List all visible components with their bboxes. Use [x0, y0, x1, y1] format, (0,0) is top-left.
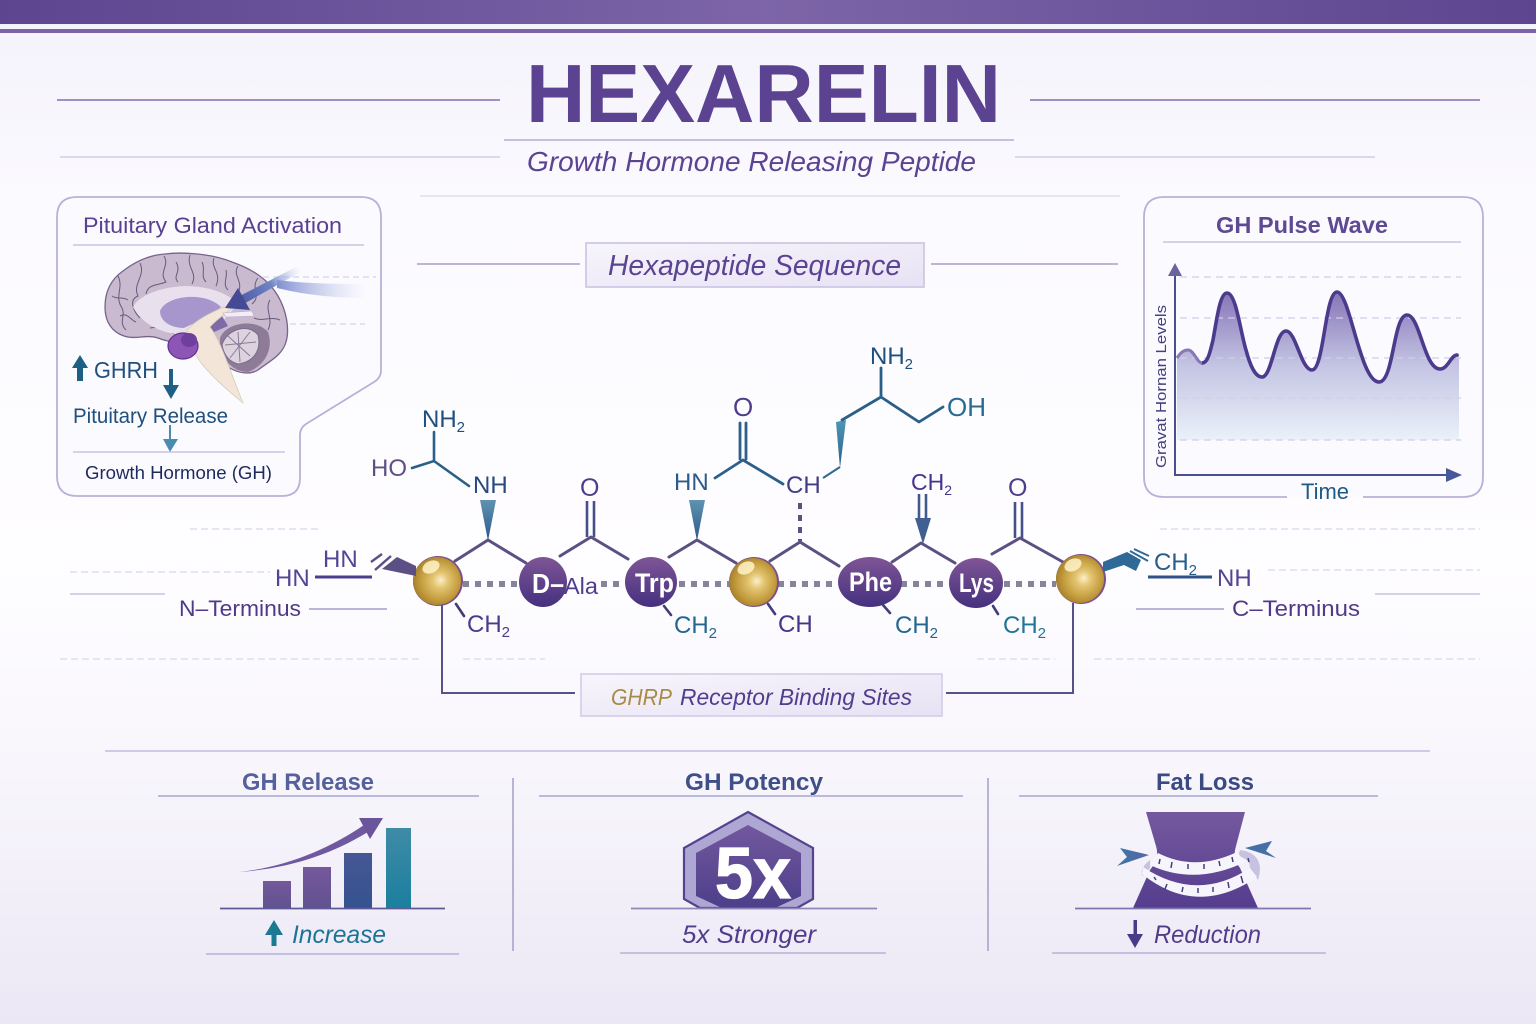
C-terminus end group: 2 [1189, 562, 1197, 579]
label: GHRP receptor binding sites: Receptor Binding Sites [680, 684, 912, 710]
top banner [0, 0, 1536, 33]
connector: receptor binding brackets [442, 603, 1073, 693]
arrow: trend [240, 818, 383, 872]
C-terminus end group [1103, 549, 1252, 592]
lower side groups: 2 [502, 624, 510, 641]
left side chain [371, 406, 508, 499]
arrow: down to growth hormone [163, 425, 178, 452]
top oxygen and CH2 labels: O [1008, 474, 1027, 502]
panel: pituitary gland activation [57, 197, 381, 496]
top oxygen and CH2 labels: O [580, 474, 599, 502]
right side chain [674, 343, 986, 499]
label: 5x stronger: 5x Stronger [682, 921, 818, 949]
lower side groups: CH [895, 612, 930, 639]
backbone bonds [455, 537, 1063, 566]
residue: Lys [949, 558, 1003, 608]
N-terminus end group: HN [323, 546, 358, 573]
right side chain: O [733, 392, 753, 422]
gold binding sphere 3 [1056, 554, 1106, 604]
heading: GH release: GH Release [242, 769, 374, 796]
arrow: pituitary pointer [225, 266, 367, 310]
lower side groups: 2 [1038, 625, 1046, 642]
left side chain: NH [422, 406, 457, 433]
label: N-terminus: N–Terminus [179, 596, 301, 621]
icon: 5x hexagon badge [631, 812, 877, 914]
lower side groups [456, 604, 1046, 642]
title: HEXARELIN [526, 47, 1001, 140]
icon: 5x hexagon badge: 5x [715, 834, 791, 914]
right side chain: OH [947, 392, 986, 422]
residue: Lys: Lys [959, 568, 994, 598]
lower side groups: 2 [930, 625, 938, 642]
label: C-terminus: C–Terminus [1232, 596, 1360, 621]
panel heading: pulse wave: GH Pulse Wave [1216, 212, 1388, 238]
arrow: up GHRH [72, 355, 88, 381]
subtitle: Growth Hormone Releasing Peptide [527, 146, 976, 177]
lower side groups: CH [467, 611, 502, 638]
heading: hexapeptide sequence [417, 243, 1118, 287]
left side chain: NH [473, 472, 508, 499]
label: GHRP receptor binding sites [581, 674, 942, 716]
top oxygen and CH2 labels: 2 [944, 482, 952, 498]
right side chain: 2 [905, 356, 913, 373]
arrow: left compress [1117, 848, 1149, 866]
label: growth hormone: Growth Hormone (GH) [85, 463, 272, 483]
gold binding sphere 1 [413, 556, 463, 606]
heading: hexapeptide sequence: Hexapeptide Sequence [608, 250, 901, 282]
C-terminus end group: NH [1217, 565, 1252, 592]
right side chain: NH [870, 343, 905, 370]
side chain wedges [480, 494, 1022, 544]
label: GHRH: GHRH [94, 357, 158, 383]
icon: waist with measuring tape [1133, 812, 1260, 908]
residue: Trp: Trp [635, 568, 674, 598]
gold binding sphere 2 [729, 557, 779, 607]
right side chain: CH [786, 472, 821, 499]
chart axes [1168, 263, 1462, 482]
residue: Phe: Phe [849, 567, 892, 597]
residue: Trp [625, 557, 677, 607]
lower side groups: CH [674, 612, 709, 639]
x axis label: Time [1301, 479, 1349, 504]
panel: fat loss [1019, 769, 1378, 953]
lower side groups: CH [1003, 612, 1038, 639]
top oxygen and CH2 labels [580, 469, 1027, 502]
arrow: down to pituitary release [163, 369, 179, 399]
top oxygen and CH2 labels: CH [911, 469, 944, 495]
wave chart [1177, 277, 1461, 440]
label: GHRP receptor binding sites: GHRP [611, 684, 673, 710]
panel: GH pulse wave [1144, 197, 1483, 504]
icon: brain [105, 253, 288, 403]
lower side groups: 2 [709, 625, 717, 642]
label: increase: Increase [292, 921, 386, 949]
panel: GH potency [539, 769, 963, 953]
peptide bond dots [463, 581, 1056, 587]
residue: D-Ala: D– [532, 568, 564, 599]
arrow: right compress [1245, 841, 1276, 858]
heading: fat loss: Fat Loss [1156, 769, 1254, 796]
label: reduction: Reduction [1154, 921, 1261, 949]
left side chain: HO [371, 455, 407, 482]
y axis label: Gravat Hornan Levels [1154, 305, 1170, 468]
label: pituitary release: Pituitary Release [73, 405, 228, 428]
panel: GH release [158, 769, 479, 954]
N-terminus end group: HN [275, 565, 310, 592]
N-terminus end group [275, 546, 416, 592]
right side chain: HN [674, 469, 709, 496]
residue: D-Ala: Ala [564, 573, 598, 599]
residue: D-Ala [519, 557, 598, 607]
C-terminus end group: CH [1154, 549, 1189, 576]
residue: Phe [838, 557, 902, 607]
left side chain: 2 [457, 419, 465, 436]
heading: GH potency: GH Potency [685, 769, 824, 796]
bar chart: rising [220, 828, 445, 908]
panel heading: pituitary: Pituitary Gland Activation [83, 213, 342, 238]
molecule: hexapeptide structure [275, 343, 1252, 642]
lower side groups: CH [778, 611, 813, 638]
